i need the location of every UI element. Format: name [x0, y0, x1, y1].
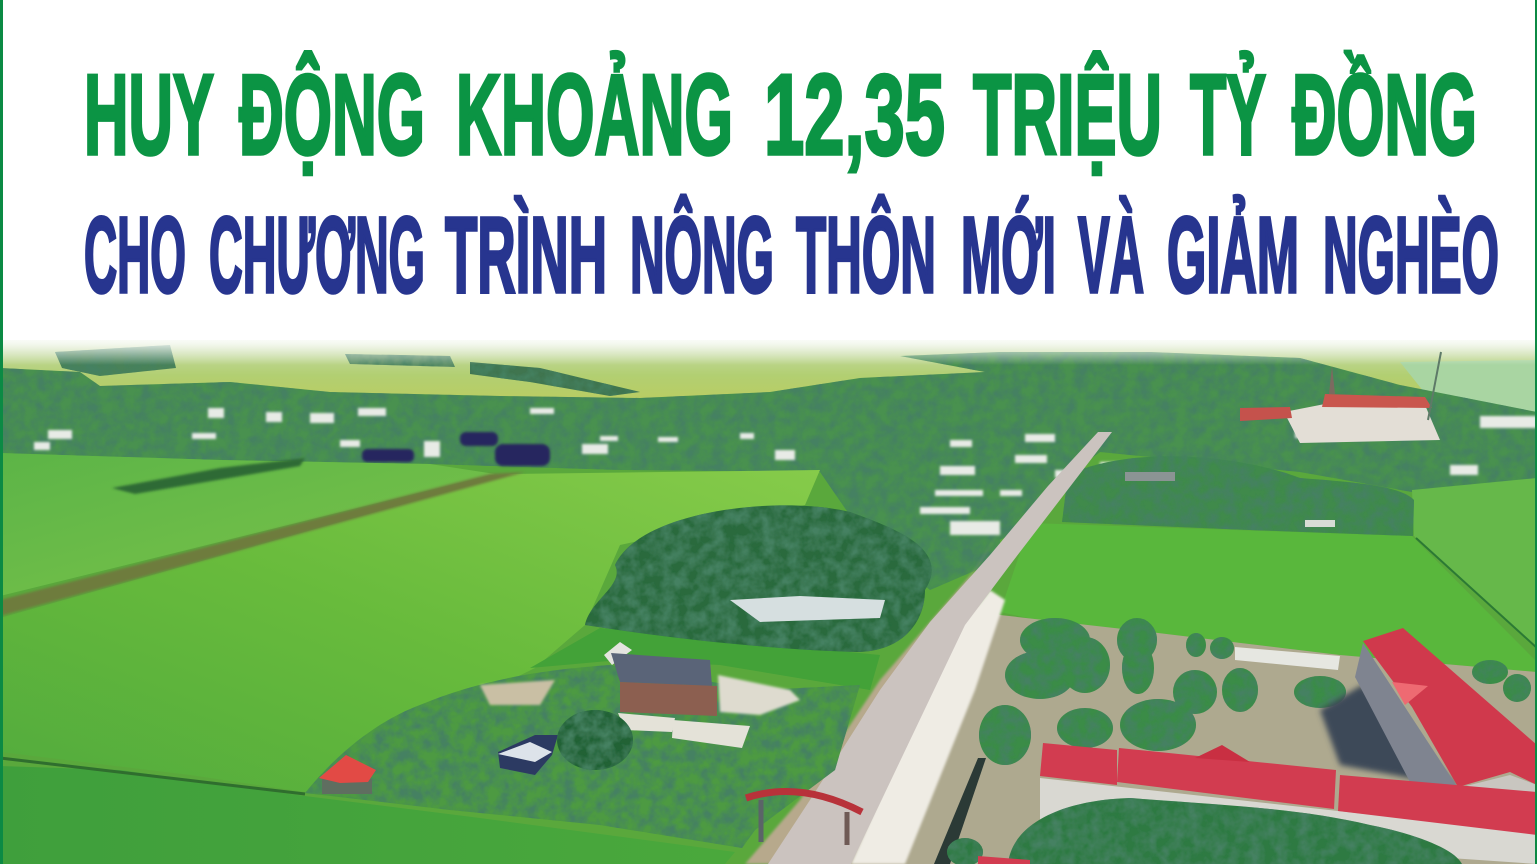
title line 1 — [84, 52, 1477, 179]
far tree clusters and tree lines — [55, 345, 640, 396]
foreground trees — [947, 798, 1462, 864]
church and buildings on the horizon — [1240, 352, 1441, 443]
far-side haze — [0, 335, 1537, 365]
school yard trees — [979, 618, 1531, 765]
central tree grove — [585, 505, 932, 652]
lower centre compound with trees — [305, 665, 860, 848]
school building, right wing — [1355, 628, 1537, 795]
white-roofed house in the grove — [730, 596, 885, 622]
ground base — [0, 340, 1537, 864]
white header background — [0, 0, 1537, 345]
field beside the central grove — [530, 628, 880, 690]
title line 2: THÔN — [796, 194, 936, 315]
dark shaded tree clumps — [362, 432, 550, 466]
tree strip in upper left field — [112, 458, 305, 494]
road white shoulder right — [851, 590, 1005, 864]
fence line along the road — [934, 758, 986, 864]
title line 1: HUY — [84, 52, 214, 179]
field edge line — [0, 758, 305, 794]
title line 2 — [84, 194, 1499, 315]
title line 1: TRIỆU — [973, 52, 1162, 179]
tree block behind right field — [1062, 456, 1414, 536]
title line 1: 12,35 — [764, 52, 945, 179]
dark shadow in the courtyard — [1320, 685, 1458, 787]
pale yard beside the house — [718, 675, 800, 715]
red entrance gate — [746, 792, 862, 845]
title line 2: CHO — [84, 194, 186, 315]
title line 2: TRÌNH — [445, 194, 607, 315]
village houses — [34, 408, 1537, 535]
lower left rice field — [0, 766, 735, 864]
upper left rice field — [0, 453, 495, 596]
white sheds — [618, 713, 750, 748]
far right field edge — [1416, 538, 1537, 648]
main house — [604, 642, 717, 716]
title — [84, 52, 1499, 315]
road shoulder left — [745, 530, 1000, 864]
main green rice field, left — [0, 470, 820, 792]
far right rice field — [1412, 478, 1537, 648]
main road — [768, 432, 1112, 864]
distant fields — [0, 340, 1537, 412]
title line 1: TỶ — [1190, 52, 1266, 179]
aerial photo of the countryside — [0, 335, 1537, 864]
red roof gazebo — [319, 755, 376, 794]
bare earth patch — [480, 680, 555, 705]
school building, front wing — [1040, 743, 1537, 864]
tree clump in front of the house — [557, 710, 633, 770]
title line 2: CHƯƠNG — [209, 194, 425, 315]
ground by the school — [850, 600, 1537, 864]
title line 2: MỚI — [961, 194, 1056, 315]
title line 2: VÀ — [1078, 194, 1144, 315]
blue and white shed — [498, 735, 558, 775]
title line 1: ĐỘNG — [239, 52, 425, 179]
houses in the tree block — [1125, 472, 1335, 527]
title line 1: KHOẢNG — [456, 52, 733, 179]
right rice field — [1000, 523, 1537, 672]
red roof at bottom edge — [978, 856, 1030, 864]
title line 2: NÔNG — [630, 194, 774, 315]
white shed in school yard — [1235, 647, 1340, 670]
title line 2: GIẢM — [1167, 194, 1299, 315]
dirt path between fields — [0, 472, 525, 616]
village tree band — [0, 352, 1537, 590]
